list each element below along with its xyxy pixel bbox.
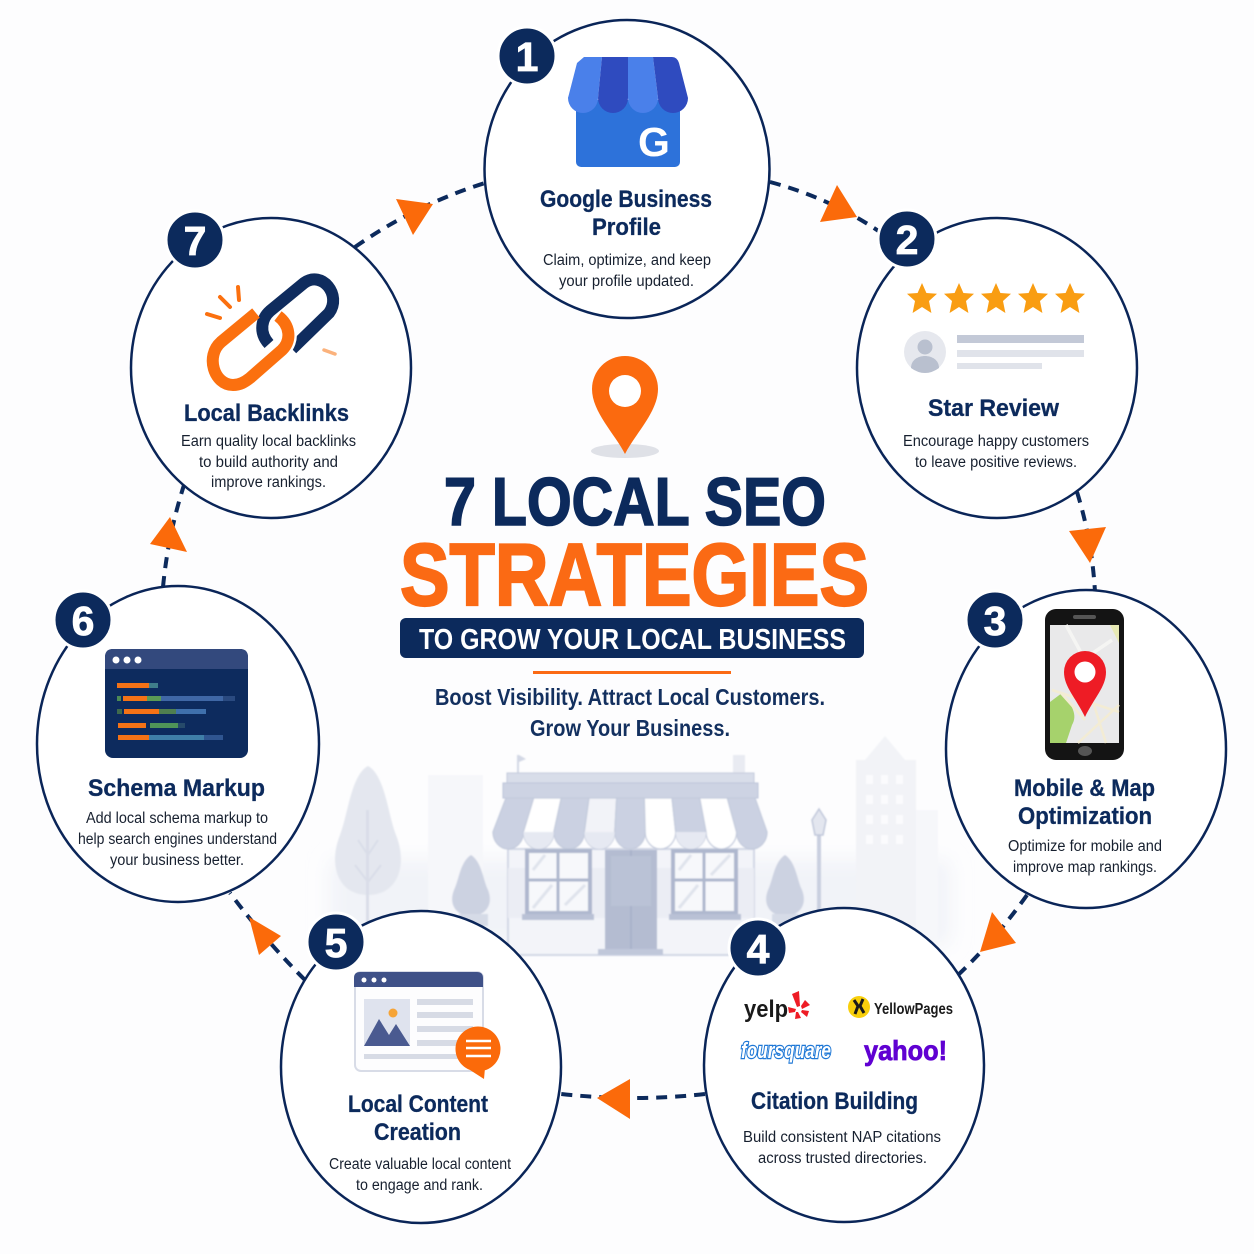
badge 6 xyxy=(54,591,112,649)
icon: chain link xyxy=(207,279,335,385)
icon: Google Business store xyxy=(568,57,688,167)
description xyxy=(1008,838,1162,876)
icon: five stars xyxy=(907,283,1085,313)
tagline xyxy=(435,684,825,741)
badge 4 xyxy=(729,919,787,977)
logo: foursquare: foursquare xyxy=(741,1038,831,1063)
icon: Google Business store: G xyxy=(638,119,670,165)
background illustration: storefront and city xyxy=(330,736,950,955)
icon: review card xyxy=(904,331,1084,373)
arrow 4 to 5 xyxy=(597,1079,630,1119)
shop building xyxy=(493,755,767,955)
panel 6: Schema Markup xyxy=(37,586,319,902)
heading: Google Business xyxy=(540,186,712,213)
heading: Schema Markup xyxy=(88,775,265,802)
heading: Local Backlinks xyxy=(184,400,349,427)
description: to build authority and xyxy=(199,454,338,471)
heading: Local Content xyxy=(348,1091,488,1118)
panel 3: Mobile & Map Optimization xyxy=(946,590,1226,908)
description: your business better. xyxy=(110,852,244,869)
icon: location pin xyxy=(591,356,659,458)
badge 2 xyxy=(878,210,936,268)
icon: content window xyxy=(354,972,483,1071)
badge 6: 6 xyxy=(72,598,94,644)
badge 7 xyxy=(166,211,224,269)
tagline: Boost Visibility. Attract Local Customers. xyxy=(435,684,825,710)
badge 1: 1 xyxy=(516,34,538,80)
panel 5: Local Content Creation xyxy=(281,911,561,1223)
subtitle banner: TO GROW YOUR LOCAL BUSINESS xyxy=(419,624,846,656)
badge 7: 7 xyxy=(184,218,206,264)
description: improve rankings. xyxy=(211,474,326,491)
description xyxy=(743,1129,941,1167)
logo: yelp xyxy=(744,991,810,1023)
logo: YellowPages: YellowPages xyxy=(874,1001,953,1018)
description: help search engines understand xyxy=(78,831,277,848)
description: across trusted directories. xyxy=(758,1150,927,1167)
description: Build consistent NAP citations xyxy=(743,1129,941,1146)
tagline: Grow Your Business. xyxy=(530,715,730,741)
description xyxy=(903,433,1089,471)
arrow 5 to 6 xyxy=(249,917,281,955)
panel 2: Star Review xyxy=(857,218,1137,518)
heading: Star Review xyxy=(928,395,1059,422)
icon: orange chat bubble xyxy=(456,1026,500,1079)
description xyxy=(543,252,711,290)
arrow path: connecting dashes xyxy=(163,182,1095,1098)
description: to leave positive reviews. xyxy=(915,454,1077,471)
arrow 7 to 1 xyxy=(396,199,433,235)
heading: Citation Building xyxy=(751,1088,918,1115)
heading: Optimization xyxy=(1018,803,1152,830)
badge 5 xyxy=(307,913,365,971)
heading: Profile xyxy=(592,214,661,241)
description xyxy=(78,810,277,869)
badge 1 xyxy=(498,27,556,85)
arrow 6 to 7 xyxy=(150,517,187,552)
heading xyxy=(1014,775,1155,830)
description: improve map rankings. xyxy=(1013,859,1157,876)
left shrub xyxy=(452,855,490,926)
description xyxy=(181,433,356,491)
faint tree xyxy=(335,766,401,922)
panel 1: Google Business Profile xyxy=(484,20,770,318)
logo: yelp: yelp xyxy=(744,996,788,1023)
description: Claim, optimize, and keep xyxy=(543,252,711,269)
badge 3: 3 xyxy=(984,598,1006,644)
description xyxy=(329,1156,512,1194)
door xyxy=(598,850,663,955)
street lamp xyxy=(812,809,826,915)
badge 5: 5 xyxy=(325,920,347,966)
right window xyxy=(669,851,741,920)
logo: YellowPages xyxy=(848,996,953,1018)
description: Earn quality local backlinks xyxy=(181,433,356,450)
panel 4: Citation Building xyxy=(704,908,984,1222)
badge 2: 2 xyxy=(896,217,918,263)
left window xyxy=(522,851,594,920)
title: STRATEGIES xyxy=(400,525,869,624)
orange divider xyxy=(533,671,731,674)
panel 7: Local Backlinks xyxy=(131,218,411,518)
description: to engage and rank. xyxy=(356,1177,483,1194)
arrow 2 to 3 xyxy=(1069,527,1106,563)
icon: code window xyxy=(105,649,248,758)
description: Create valuable local content xyxy=(329,1156,512,1173)
heading xyxy=(348,1091,488,1146)
description: your profile updated. xyxy=(559,273,694,290)
heading: Creation xyxy=(374,1119,461,1146)
icon: phone with map pin xyxy=(1045,609,1124,760)
title: 7 LOCAL SEO xyxy=(444,464,826,540)
badge 4: 4 xyxy=(747,926,770,972)
heading: Mobile & Map xyxy=(1014,775,1155,802)
badge 3 xyxy=(966,591,1024,649)
arrow 3 to 4 xyxy=(980,912,1016,952)
description: Add local schema markup to xyxy=(86,810,268,827)
right shrub xyxy=(766,855,804,926)
description: Encourage happy customers xyxy=(903,433,1089,450)
title xyxy=(400,464,869,624)
arrow 1 to 2 xyxy=(820,185,857,222)
heading xyxy=(540,186,712,241)
description: Optimize for mobile and xyxy=(1008,838,1162,855)
logo: yahoo: yahoo! xyxy=(864,1035,947,1066)
